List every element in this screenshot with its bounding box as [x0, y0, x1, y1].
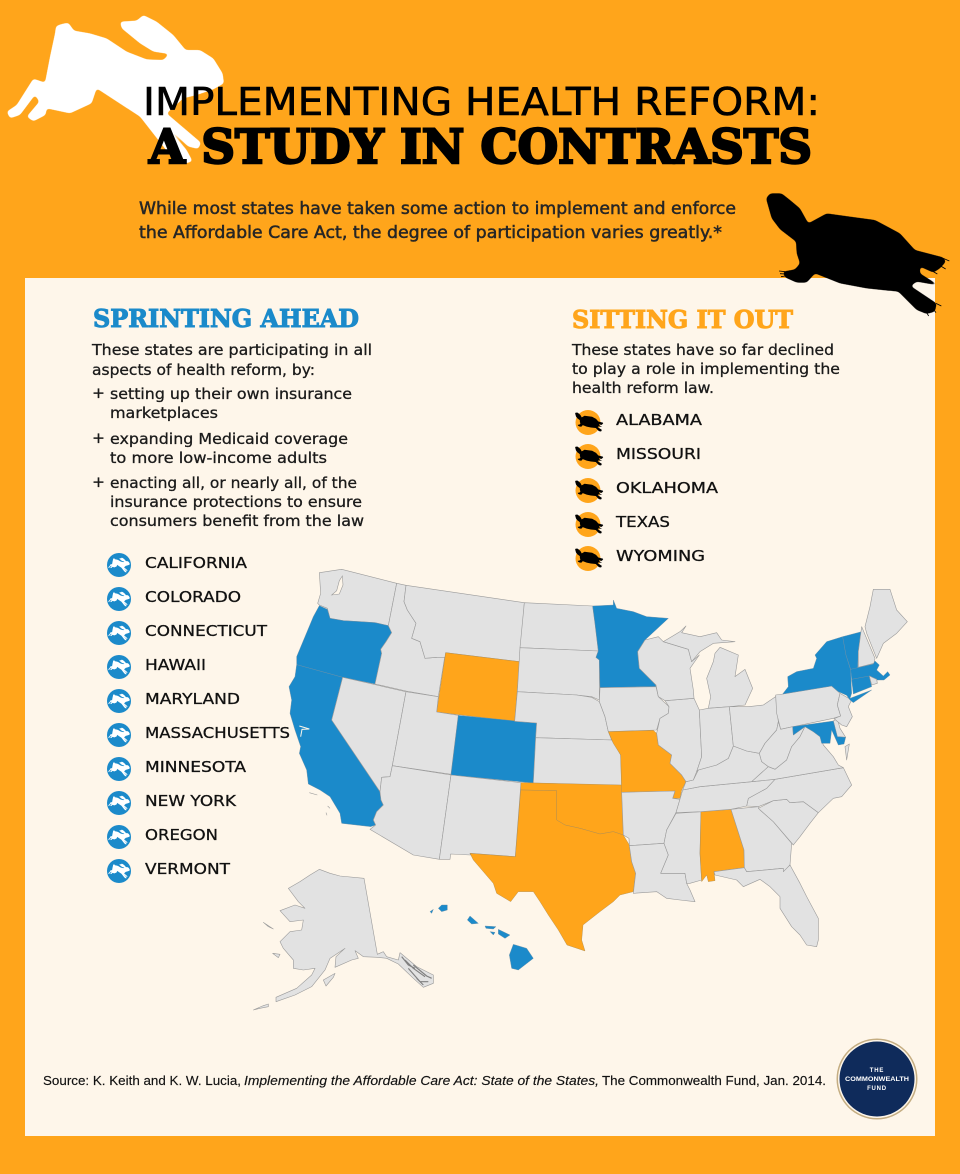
- list: participation criteria: expanding Medicaid coverage: [110, 430, 348, 448]
- state: South Dakota: [517, 648, 599, 700]
- state: Maryland: [793, 721, 846, 745]
- state: Michigan upper peninsula: [663, 626, 735, 662]
- state: North Dakota: [520, 603, 598, 651]
- map of the United States: [253, 569, 907, 1010]
- state: Maine: [865, 589, 907, 658]
- text: sprinting ahead description: These states are participating in all: [91, 341, 372, 359]
- state: Colorado: [451, 715, 537, 783]
- state: Oregon: [297, 606, 392, 684]
- state: Wisconsin: [638, 637, 699, 701]
- list: sprinting states: COLORADO: [145, 588, 241, 606]
- list: sprinting states: OREGON: [145, 826, 218, 844]
- logo: The Commonwealth Fund: FUND: [867, 1086, 887, 1092]
- source note: The Commonwealth Fund, Jan. 2014.: [602, 1073, 826, 1088]
- list: participation criteria: insurance protections to ensure: [110, 493, 362, 511]
- state: Illinois: [657, 698, 702, 782]
- list: sprinting states: MARYLAND: [145, 690, 240, 708]
- state: New Hampshire: [858, 627, 875, 667]
- text: sitting it out description: to play a role in implementing the: [572, 360, 840, 378]
- state: Michigan lower peninsula: [707, 647, 753, 708]
- San Francisco Bay: [299, 726, 309, 737]
- heading: sprinting ahead: SPRINTING AHEAD: [93, 304, 359, 333]
- list: sitting-out states: OKLAHOMA: [616, 479, 718, 497]
- list: sprinting states: VERMONT: [145, 860, 231, 878]
- list: sprinting states: MASSACHUSETTS: [145, 724, 290, 742]
- state: Rhode Island: [869, 676, 877, 685]
- list: participation criteria: to more low-income adults: [110, 449, 327, 467]
- state: Alaska: [253, 869, 433, 1010]
- state: Arkansas: [622, 791, 680, 846]
- state: Oklahoma: [521, 783, 623, 835]
- state: Ohio: [729, 697, 778, 753]
- list: sprinting states: CONNECTICUT: [145, 622, 268, 640]
- list: participation criteria: [92, 384, 364, 530]
- state: Mississippi: [661, 812, 702, 883]
- text: sitting it out description: health reform law.: [572, 379, 714, 397]
- state: Wyoming: [437, 653, 520, 721]
- text: sprinting ahead description: aspects of health reform, by:: [92, 361, 315, 379]
- logo: The Commonwealth Fund: THE: [870, 1068, 884, 1074]
- source note: Source: K. Keith and K. W. Lucia,: [43, 1073, 241, 1088]
- state: California: [289, 665, 383, 827]
- state: Louisiana: [629, 843, 695, 902]
- list: participation criteria: marketplaces: [110, 404, 218, 422]
- title: [143, 80, 820, 175]
- icon: turtle: [766, 193, 949, 316]
- state: Massachusetts: [851, 661, 890, 680]
- state: Pennsylvania: [776, 686, 841, 729]
- state: Florida: [714, 865, 818, 947]
- source note: [43, 1073, 826, 1088]
- state: Indiana: [697, 707, 733, 772]
- state: Kansas: [533, 738, 622, 786]
- state: North Carolina: [747, 768, 852, 813]
- list: sitting-out states: WYOMING: [616, 547, 705, 565]
- state: Hawaii: [430, 905, 533, 970]
- list: participation criteria: setting up their own insurance: [110, 385, 352, 403]
- state: Utah: [392, 692, 458, 774]
- state: Alabama: [700, 809, 744, 882]
- intro text: the Affordable Care Act, the degree of participation varies greatly.*: [139, 223, 722, 242]
- state: West Virginia: [759, 722, 805, 769]
- title: A STUDY IN CONTRASTS: [148, 120, 812, 175]
- state: New York: [783, 637, 872, 703]
- text: sitting it out description: These states have so far declined: [571, 341, 834, 359]
- title: IMPLEMENTING HEALTH REFORM:: [143, 80, 820, 125]
- list: participation criteria: consumers benefit from the law: [110, 512, 364, 530]
- intro text: [139, 199, 736, 242]
- list: sitting-out states: ALABAMA: [616, 411, 702, 429]
- state: Nevada: [332, 677, 406, 792]
- list: sitting-out states: [575, 410, 718, 571]
- state: Connecticut: [852, 676, 872, 694]
- logo: The Commonwealth Fund: COMMONWEALTH: [845, 1077, 909, 1083]
- state: Kentucky: [683, 746, 768, 790]
- state: Washington: [318, 569, 397, 626]
- text: sitting it out description: [571, 341, 840, 397]
- source note: Implementing the Affordable Care Act: State of the States,: [244, 1073, 599, 1088]
- list: sprinting states: HAWAII: [145, 656, 206, 674]
- list: participation criteria: +: [92, 429, 105, 447]
- intro text: While most states have taken some action to implement and enforce: [139, 199, 736, 218]
- state: Vermont: [843, 632, 862, 669]
- state: Texas: [470, 790, 636, 951]
- state: New Jersey: [834, 693, 852, 727]
- Channel Islands: [309, 793, 330, 815]
- state: Nebraska: [515, 692, 612, 740]
- list: participation criteria: +: [92, 473, 105, 491]
- state: Minnesota: [593, 600, 668, 688]
- list: sprinting states: MINNESOTA: [145, 758, 246, 776]
- state: Georgia: [731, 807, 792, 873]
- state: New Mexico: [439, 775, 521, 859]
- state: Tennessee: [676, 779, 775, 813]
- state: South Carolina: [758, 799, 818, 845]
- heading: sitting it out: SITTING IT OUT: [572, 305, 793, 334]
- list: participation criteria: enacting all, or nearly all, of the: [110, 474, 357, 492]
- state: Virginia: [752, 727, 849, 782]
- state: Arizona: [370, 766, 451, 859]
- list: sitting-out states: TEXAS: [615, 513, 670, 531]
- list: sprinting states: [107, 553, 290, 883]
- text: sprinting ahead description: [91, 341, 372, 379]
- state: Idaho: [375, 583, 445, 697]
- list: sprinting states: CALIFORNIA: [145, 554, 247, 572]
- state: Missouri: [608, 730, 686, 798]
- state: Delaware: [833, 718, 846, 737]
- list: sprinting states: NEW YORK: [145, 792, 237, 810]
- state: Montana: [404, 585, 524, 662]
- panel: cream content area: [25, 278, 935, 1136]
- list: sitting-out states: MISSOURI: [616, 445, 701, 463]
- Puget Sound: [332, 576, 343, 595]
- list: participation criteria: +: [92, 384, 105, 402]
- state: Iowa: [599, 687, 669, 732]
- logo: The Commonwealth Fund: [836, 1038, 918, 1120]
- icon: leaping rabbit: [7, 15, 224, 164]
